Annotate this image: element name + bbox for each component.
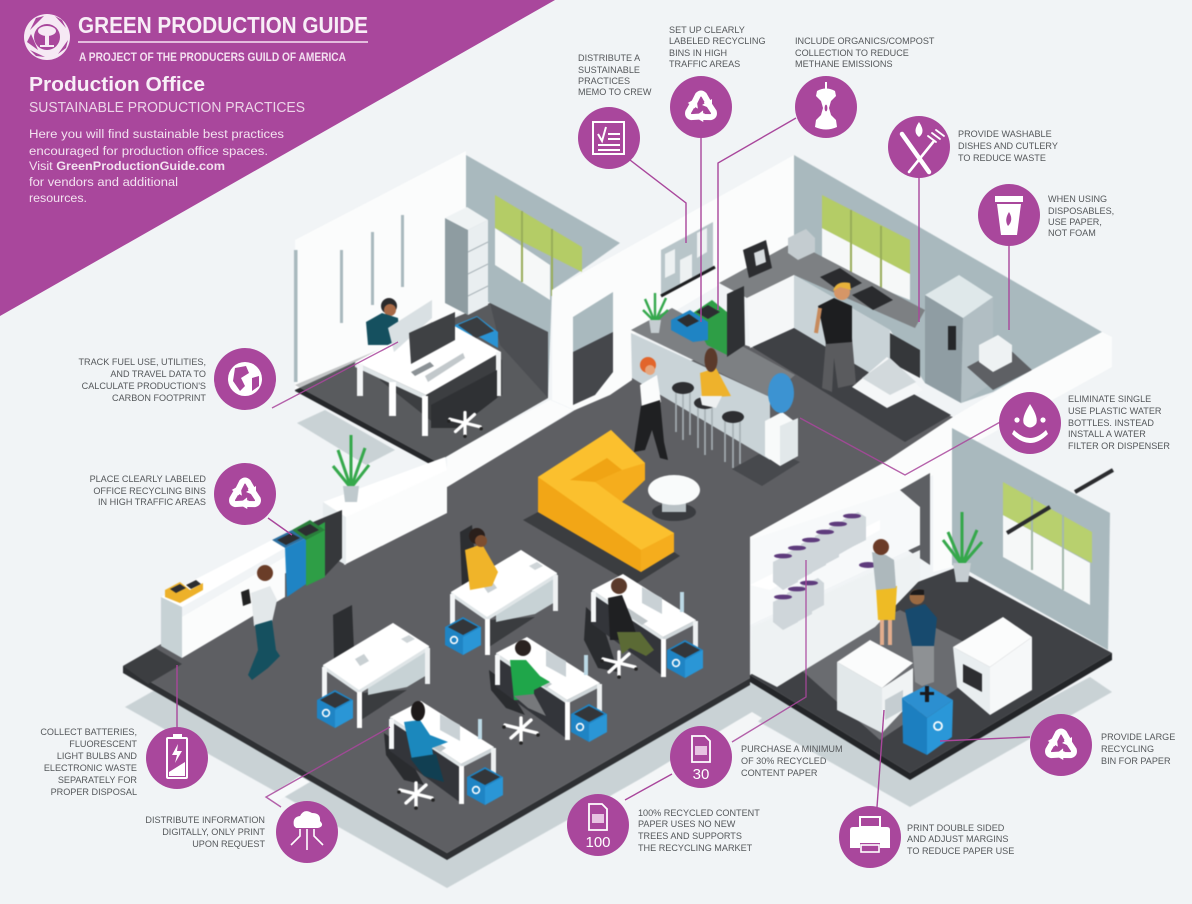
text: digital: UPON REQUEST: [192, 839, 265, 849]
banner: [0, 0, 555, 316]
copier front: [837, 640, 913, 733]
text: carbon: AND TRAVEL DATA TO: [110, 369, 206, 379]
text: 100 percent: [638, 808, 760, 853]
kitchen recycling bins: [671, 286, 745, 357]
icon: recycle: [683, 94, 718, 125]
text: memo: SUSTAINABLE: [578, 65, 640, 75]
text: batteries: ELECTRONIC WASTE: [44, 763, 137, 773]
text: compost: INCLUDE ORGANICS/COMPOST: [795, 36, 935, 46]
water bottle shelf: [967, 346, 1032, 390]
copy room floor: [750, 568, 1112, 773]
callout: 30 percent recycled: [670, 726, 843, 788]
text: 100 percent: TREES AND SUPPORTS: [638, 831, 742, 841]
icon: memo: [593, 122, 624, 154]
text: recycling bins: BINS IN HIGH: [669, 48, 727, 58]
desk: man in green: [489, 637, 607, 745]
icon: paper 30: 30: [693, 766, 709, 783]
callout: memo to crew: [578, 53, 652, 169]
reception plant: [333, 435, 369, 502]
private office room: [294, 151, 620, 468]
text: washable dishes: DISHES AND CUTLERY: [958, 141, 1058, 151]
icon: battery: [167, 734, 187, 778]
callout: 100 percent recycled: [567, 794, 760, 856]
text: office recycling: [90, 474, 206, 507]
illustration: isometric production office: [123, 151, 1113, 888]
water cooler: [765, 373, 798, 466]
icon: recycle: [227, 480, 262, 512]
text: 30 percent: OF 30% RECYCLED: [741, 756, 827, 766]
text: carbon: CARBON FOOTPRINT: [112, 393, 206, 403]
text: batteries: LIGHT BULBS AND: [57, 751, 137, 761]
kitchen: [631, 155, 1102, 486]
text: memo: MEMO TO CREW: [578, 87, 652, 97]
text: washable dishes: PROVIDE WASHABLE: [958, 129, 1052, 139]
text: 30 percent: PURCHASE A MINIMUM: [741, 744, 843, 754]
kitchen wall: [794, 155, 1102, 403]
icon: apple core: [815, 82, 837, 130]
kitchen window: [822, 228, 910, 300]
text: carbon: CALCULATE PRODUCTION'S: [82, 381, 206, 391]
intro text: [29, 127, 284, 205]
text: water: USE PLASTIC WATER: [1068, 406, 1162, 416]
intro text: for vendors and additional: [29, 175, 178, 189]
callout: double sided printing: [839, 806, 1014, 868]
icon: paper 100: 100: [585, 834, 611, 851]
icon: printer: [850, 817, 890, 852]
desk: empty: [317, 605, 430, 728]
callout: compost: [795, 36, 935, 138]
callout: large paper bin: [1030, 714, 1175, 776]
icon: knife and fork: [902, 122, 944, 172]
stools: [672, 382, 744, 468]
callout: office recycling: [90, 463, 276, 525]
kitchen floor rug: [752, 327, 951, 442]
text: office recycling: IN HIGH TRAFFIC AREAS: [98, 497, 206, 507]
intro text: Visit GreenProductionGuide.com: [29, 159, 225, 173]
text: washable dishes: [958, 129, 1058, 163]
text: batteries: PROPER DISPOSAL: [51, 787, 137, 797]
office white wall: [295, 151, 466, 390]
text: 100 percent: PAPER USES NO NEW: [638, 819, 736, 829]
callout: digital information: [145, 801, 338, 863]
text: water: [1068, 394, 1170, 451]
text: paper bin: RECYCLING: [1101, 744, 1154, 754]
text: batteries: [40, 727, 137, 797]
text: recycling bins: LABELED RECYCLING: [669, 36, 766, 46]
logo subtitle: A PROJECT OF THE PRODUCERS GUILD OF AMERICA: [79, 52, 346, 64]
woman with tablet: [241, 565, 280, 680]
text: 100 percent: 100% RECYCLED CONTENT: [638, 808, 760, 818]
callout: paper cups: [978, 184, 1114, 246]
blue bin in office: [455, 316, 498, 348]
text: compost: COLLECTION TO REDUCE: [795, 48, 909, 58]
fridge: [925, 295, 963, 403]
text: paper cups: [1048, 194, 1114, 238]
icon: water drop: [1012, 404, 1048, 443]
reception recycling bins: [272, 520, 325, 597]
ground plate: [125, 410, 1112, 888]
desk: man in black: [584, 574, 703, 679]
heading: Production Office: [29, 74, 205, 96]
man in black shirt: [816, 282, 856, 392]
main floor: [123, 345, 953, 860]
center wall with board: [447, 155, 794, 487]
desk: woman in yellow: [445, 525, 558, 655]
toaster: [788, 229, 815, 260]
text: printing: TO REDUCE PAPER USE: [907, 846, 1014, 856]
office floor: [295, 303, 548, 462]
copier back: [953, 617, 1032, 715]
text: digital: DIGITALLY, ONLY PRINT: [162, 827, 265, 837]
callout: recycling bins in traffic areas: [669, 25, 766, 138]
copy room: [750, 332, 1113, 780]
text: water: FILTER OR DISPENSER: [1068, 441, 1170, 451]
text: paper bin: [1101, 732, 1175, 766]
paper storage shelves: [750, 490, 920, 625]
text: 100 percent: THE RECYCLING MARKET: [638, 843, 753, 853]
text: water: BOTTLES. INSTEAD: [1068, 418, 1154, 428]
office chair: [431, 370, 497, 438]
icon: paper 30: [692, 736, 710, 783]
seated man: [366, 298, 400, 345]
callout: batteries: [40, 727, 208, 797]
text: water: INSTALL A WATER: [1068, 429, 1146, 439]
office gray wall: [466, 155, 620, 398]
text: compost: METHANE EMISSIONS: [795, 59, 893, 69]
text: batteries: COLLECT BATTERIES,: [40, 727, 137, 737]
text: printing: [907, 823, 1014, 856]
icon: cup: [995, 196, 1023, 235]
text: digital: DISTRIBUTE INFORMATION: [145, 815, 265, 825]
text: office recycling: OFFICE RECYCLING BINS: [93, 486, 206, 496]
dish rack: [852, 357, 923, 408]
lounge sofa and coffee table: [523, 430, 700, 585]
text: batteries: FLUORESCENT: [69, 739, 137, 749]
text: memo: DISTRIBUTE A: [578, 53, 641, 63]
office desk: [355, 300, 502, 436]
filing cabinet: [445, 218, 468, 315]
intro text: Here you will find sustainable best practices: [29, 127, 284, 141]
man in navy shirt: [905, 590, 937, 686]
plant on counter: [643, 293, 668, 333]
logo icon: [24, 14, 70, 60]
text: paper cups: DISPOSABLES,: [1048, 206, 1114, 216]
text: digital: [145, 815, 265, 849]
text: batteries: SEPARATELY FOR: [58, 775, 137, 785]
text: paper cups: NOT FOAM: [1048, 228, 1096, 238]
callout: washable dishes: [888, 116, 1058, 178]
text: paper bin: PROVIDE LARGE: [1101, 732, 1175, 742]
intro text: encouraged for production office spaces.: [29, 144, 268, 158]
text: water: ELIMINATE SINGLE: [1068, 394, 1151, 404]
text: recycling bins: TRAFFIC AREAS: [669, 59, 740, 69]
coffee machine: [743, 240, 772, 278]
icon: globe: [228, 362, 262, 396]
island counter: [631, 333, 770, 460]
text: carbon: [78, 357, 206, 403]
desk: woman in blue: [384, 701, 503, 810]
text: office recycling: PLACE CLEARLY LABELED: [90, 474, 206, 484]
icon: recycle: [1043, 732, 1078, 763]
text: paper bin: BIN FOR PAPER: [1101, 756, 1171, 766]
copy room gray wall: [952, 428, 1110, 650]
walking woman with orange hair: [634, 357, 668, 460]
copy room white wall: [750, 332, 1112, 577]
callout: water: [999, 392, 1170, 454]
text: 30 percent: CONTENT PAPER: [741, 768, 818, 778]
seated woman in yellow: [700, 348, 731, 408]
logo title: GREEN PRODUCTION GUIDE: [78, 12, 368, 38]
text: paper cups: USE PAPER,: [1048, 217, 1102, 227]
callout: carbon footprint: [78, 348, 276, 410]
woman in yellow skirt: [872, 539, 897, 645]
text: paper cups: WHEN USING: [1048, 194, 1107, 204]
connector lines: [177, 118, 1030, 807]
copy room plant: [943, 512, 982, 582]
text: memo: [578, 53, 652, 97]
counter: [719, 242, 925, 328]
battery collection counter: [161, 540, 285, 658]
bulletin board: [661, 222, 713, 296]
intro text: resources.: [29, 191, 87, 205]
icon: cloud: [291, 811, 323, 850]
text: printing: PRINT DOUBLE SIDED: [907, 823, 1005, 833]
text: recycling bins: SET UP CLEARLY: [669, 25, 745, 35]
office window: [495, 228, 550, 300]
paper boxes: [773, 512, 866, 630]
icon: paper 100: [585, 804, 611, 851]
text: compost: [795, 36, 935, 69]
text: printing: AND ADJUST MARGINS: [907, 834, 1008, 844]
text: washable dishes: TO REDUCE WASTE: [958, 153, 1046, 163]
large blue paper bin: [902, 685, 953, 755]
subheading: SUSTAINABLE PRODUCTION PRACTICES: [29, 100, 305, 116]
text: memo: PRACTICES: [578, 76, 630, 86]
reception counter: [161, 435, 447, 680]
text: recycling bins: [669, 25, 766, 69]
text: carbon: TRACK FUEL USE, UTILITIES,: [78, 357, 206, 367]
text: 30 percent: [741, 744, 843, 778]
